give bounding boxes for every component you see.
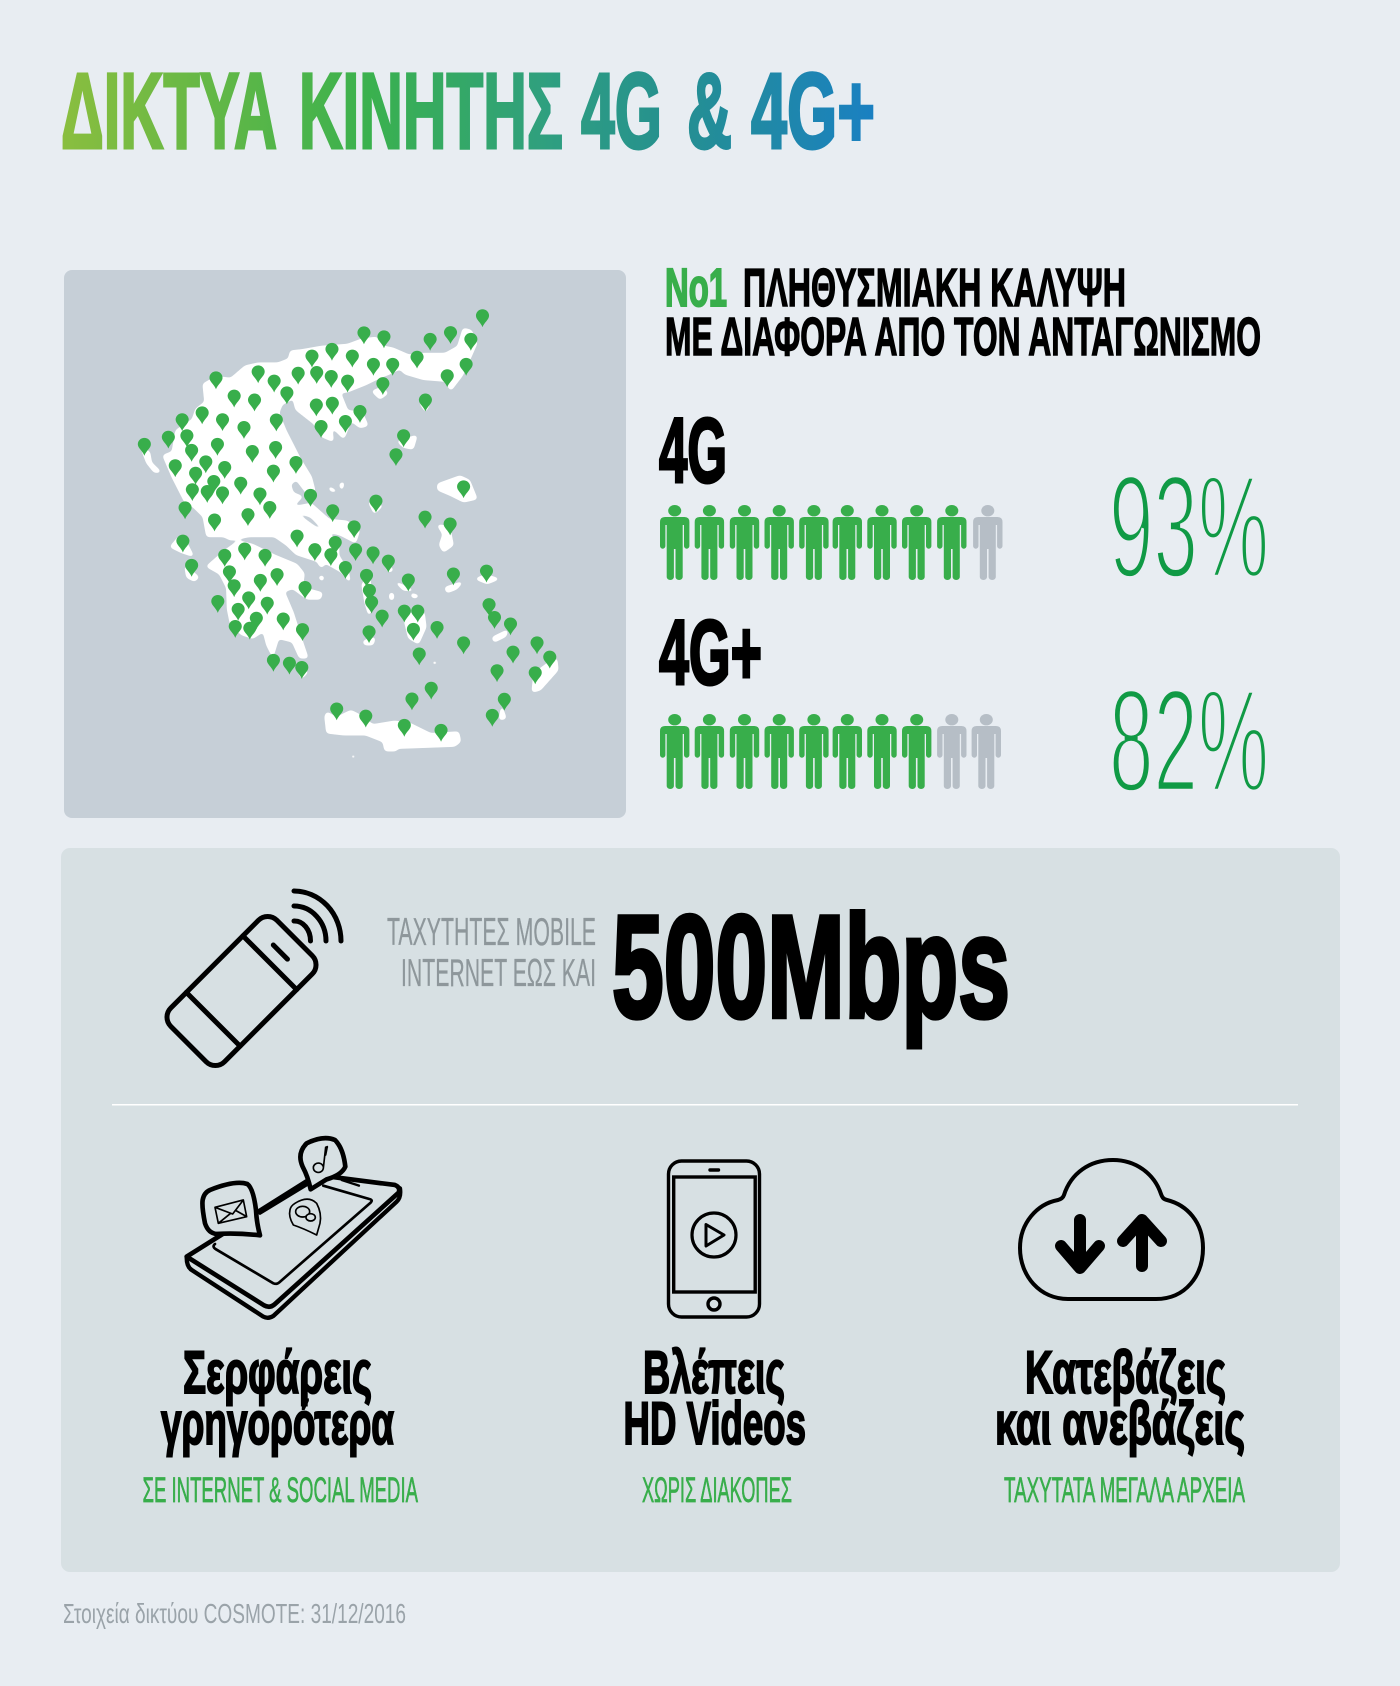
title: 4G <box>581 50 662 171</box>
speed value: 500Mbps <box>612 885 1010 1048</box>
title: & <box>687 50 732 171</box>
benefit: surf faster: γρηγορότερα <box>161 1390 394 1457</box>
title <box>61 50 875 171</box>
4G+ percentage: 82% <box>1109 659 1269 822</box>
4G+ label: 4G+ <box>659 602 762 704</box>
network pins <box>138 309 556 742</box>
map of Greece <box>142 329 557 757</box>
title: ΔΙΚΤΥΑ <box>61 50 277 171</box>
benefit: HD videos: HD Videos <box>624 1390 806 1457</box>
icon: phone with signal <box>162 891 341 1071</box>
benefit: surf faster <box>142 1339 418 1510</box>
speed caption: INTERNET ΕΩΣ ΚΑΙ <box>401 952 596 995</box>
speed caption: ΤΑΧΥΤΗΤΕΣ MOBILE <box>387 911 596 954</box>
benefit: HD videos: ΧΩΡΙΣ ΔΙΑΚΟΠΕΣ <box>642 1471 792 1510</box>
footnote: Στοιχεία δικτύου COSMOTE: 31/12/2016 <box>63 1598 406 1629</box>
title: 4G+ <box>751 50 875 171</box>
benefit: download and upload <box>995 1339 1245 1510</box>
panel: coverage map <box>64 270 626 818</box>
benefit: surf faster: Σερφάρεις <box>183 1339 372 1406</box>
4G percentage: 93% <box>1109 445 1269 608</box>
4G label: 4G <box>659 400 727 502</box>
speed caption <box>387 911 596 995</box>
icon: phone with play button <box>668 1161 760 1317</box>
benefit: HD videos: Βλέπεις <box>643 1339 785 1406</box>
coverage heading: ΠΛΗΘΥΣΜΙΑΚΗ ΚΑΛΥΨΗ <box>743 258 1126 318</box>
4G people row: 9 of 10 <box>660 505 1002 580</box>
benefit: download and upload: Κατεβάζεις <box>1025 1339 1226 1406</box>
coverage heading: Νο1 <box>665 258 727 318</box>
coverage heading <box>665 258 1261 367</box>
icon: cloud with up and down arrows <box>1020 1160 1203 1299</box>
panel: speed and benefits <box>61 848 1340 1572</box>
icon: phone with app bubbles <box>187 1138 400 1318</box>
title: ΚΙΝΗΤΗΣ <box>299 50 563 171</box>
4G+ people row: 8 of 10 <box>660 714 1001 789</box>
benefit: HD videos <box>624 1339 806 1510</box>
benefit: download and upload: και ανεβάζεις <box>995 1390 1245 1457</box>
benefit: surf faster: ΣΕ INTERNET & SOCIAL MEDIA <box>142 1471 418 1510</box>
